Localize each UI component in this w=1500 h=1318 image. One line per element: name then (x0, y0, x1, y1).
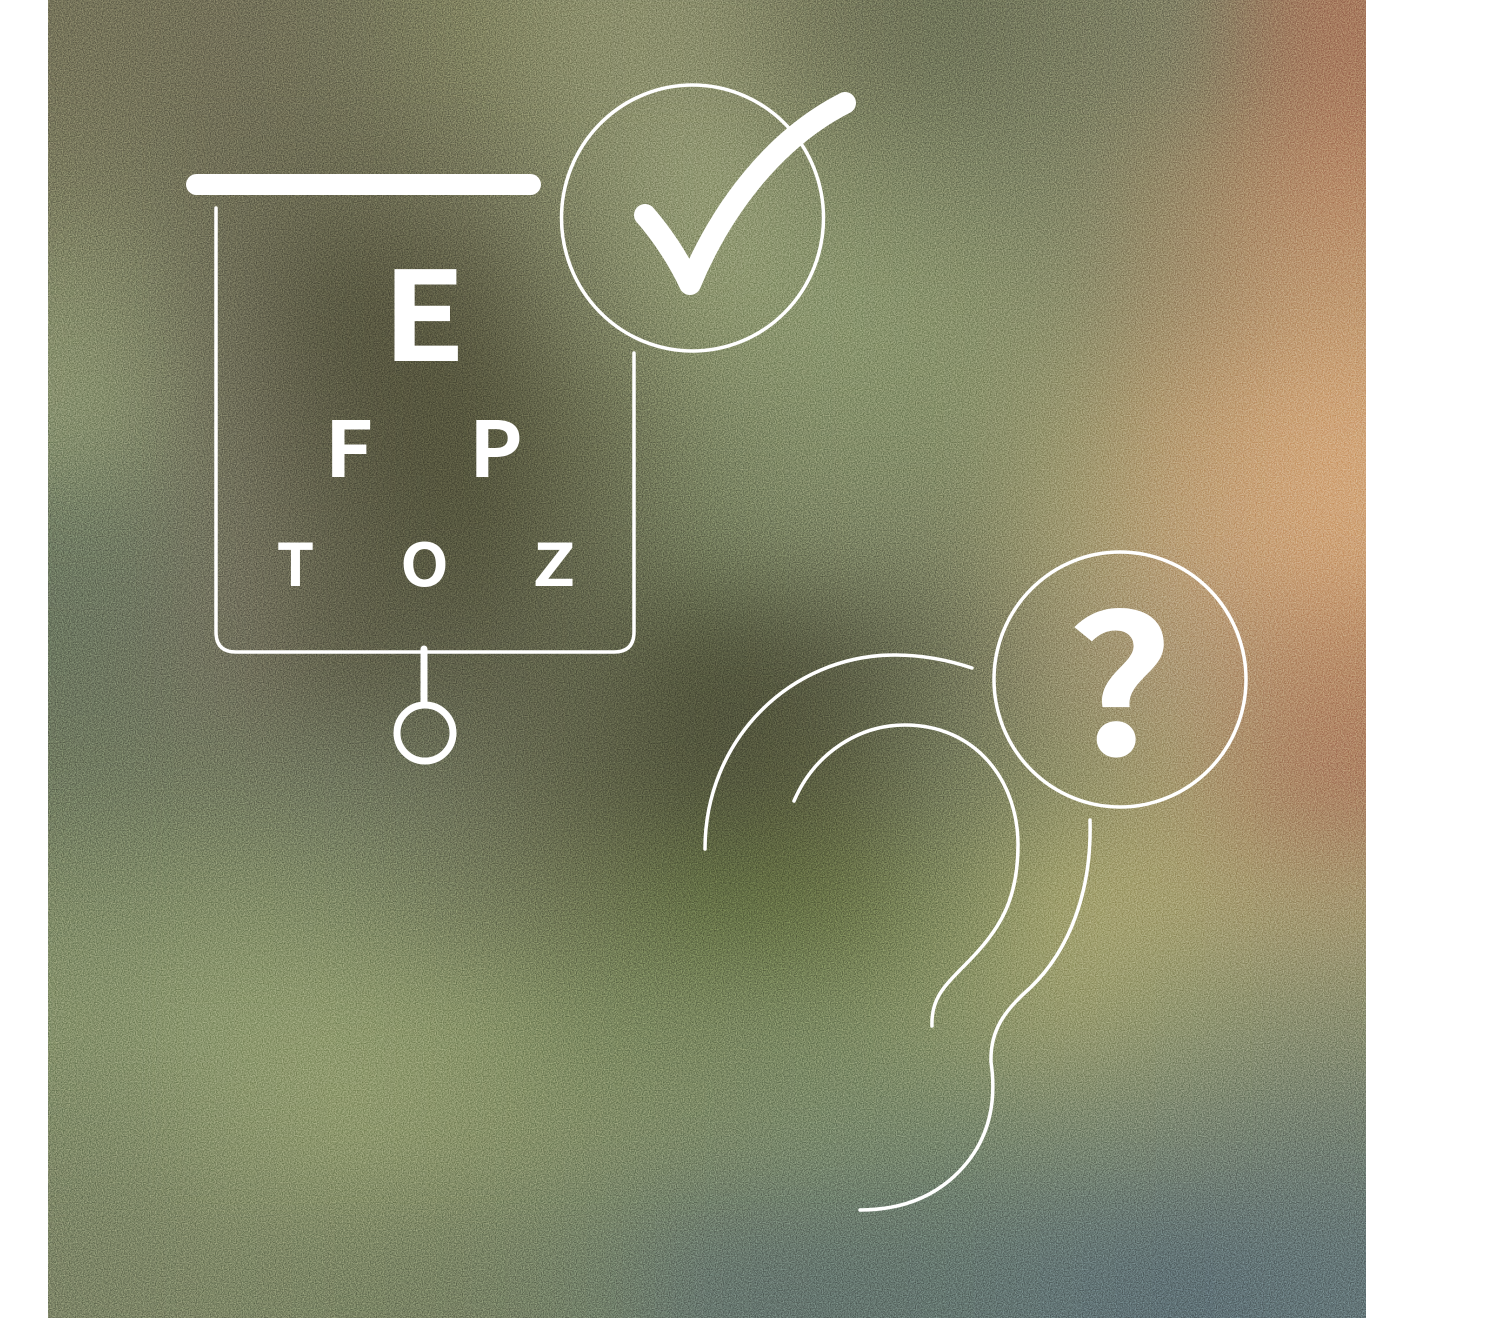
row 7 (48, 720, 1366, 841)
badge circle (994, 552, 1246, 807)
chart letters: F (325, 389, 373, 500)
row 4 (48, 360, 1366, 481)
chart letters: Z (533, 517, 575, 603)
chart pull cord and ring (397, 649, 453, 761)
check mark badge (562, 85, 845, 351)
row 10 (48, 1080, 1366, 1201)
inner ear curve (794, 725, 1018, 1026)
row 11 (48, 1200, 1366, 1318)
row 1 (48, 0, 1366, 120)
outer ear curve bottom (860, 820, 1090, 1210)
row 8 (48, 840, 1366, 961)
badge circle (562, 85, 824, 351)
row 5 (48, 480, 1366, 601)
question mark badge (994, 536, 1246, 811)
row 6 (48, 600, 1366, 721)
chart letters: E (382, 217, 466, 397)
icon: check mark (645, 103, 845, 284)
eye chart (186, 174, 634, 761)
row 9 (48, 960, 1366, 1081)
chart frame (216, 208, 634, 652)
chart top bar (186, 174, 541, 195)
chart letters: P (469, 387, 523, 499)
icon: question mark: ? (1065, 536, 1174, 811)
ear outline (705, 655, 1090, 1210)
chart letters: O (400, 517, 449, 603)
chart letters: T (277, 519, 314, 604)
row 2 (48, 120, 1366, 241)
outer ear curve top (705, 655, 972, 849)
row 3 (48, 240, 1366, 361)
chart letters (277, 217, 575, 604)
